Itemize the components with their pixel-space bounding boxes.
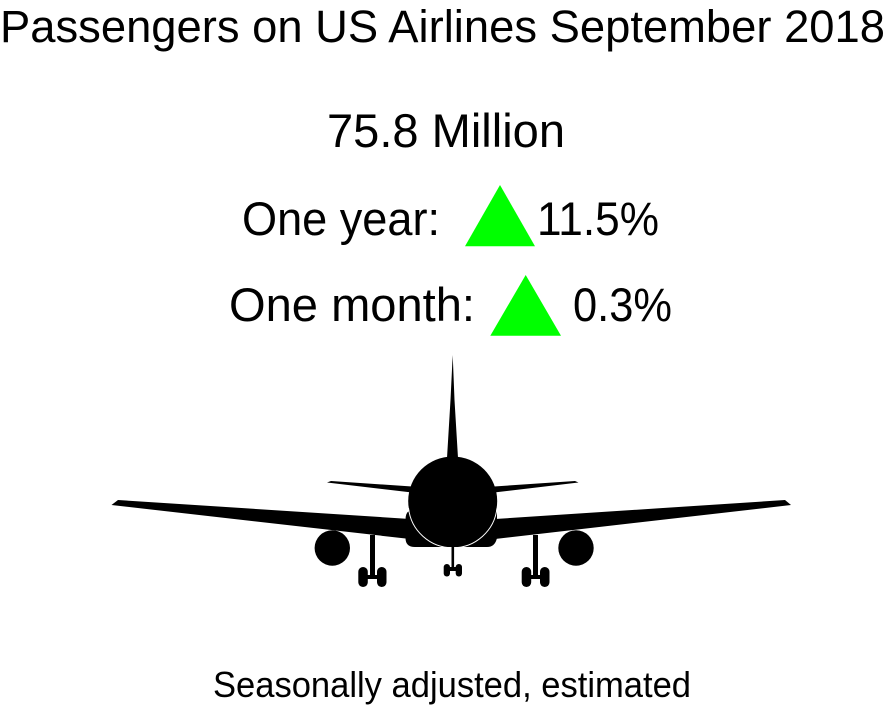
one month label: One month:	[229, 278, 475, 331]
left wing	[112, 500, 410, 539]
icon: green up triangle, one month	[490, 275, 561, 336]
one year label: One year:	[242, 192, 440, 245]
fuselage	[408, 456, 497, 546]
right engine	[558, 530, 594, 566]
left engine	[315, 530, 350, 566]
icon: airplane front view	[112, 355, 791, 587]
footnote: Seasonally adjusted, estimated	[213, 664, 691, 705]
one month value: 0.3%	[573, 278, 672, 331]
total passengers figure: 75.8 Million	[327, 104, 565, 157]
icon: green up triangle, one year	[465, 185, 535, 246]
one year value: 11.5%	[537, 192, 659, 245]
one month row	[229, 275, 672, 336]
tail fin	[447, 355, 458, 458]
right tailplane	[494, 481, 578, 492]
fuselage belly	[406, 511, 497, 547]
fuselage highlight arc	[408, 508, 497, 548]
nose landing gear	[444, 546, 462, 576]
right wing	[495, 500, 791, 539]
left landing gear	[358, 535, 386, 587]
one year row	[242, 185, 659, 246]
right landing gear	[522, 535, 550, 587]
left tailplane	[327, 481, 412, 492]
title: Passengers on US Airlines September 2018	[0, 1, 885, 52]
